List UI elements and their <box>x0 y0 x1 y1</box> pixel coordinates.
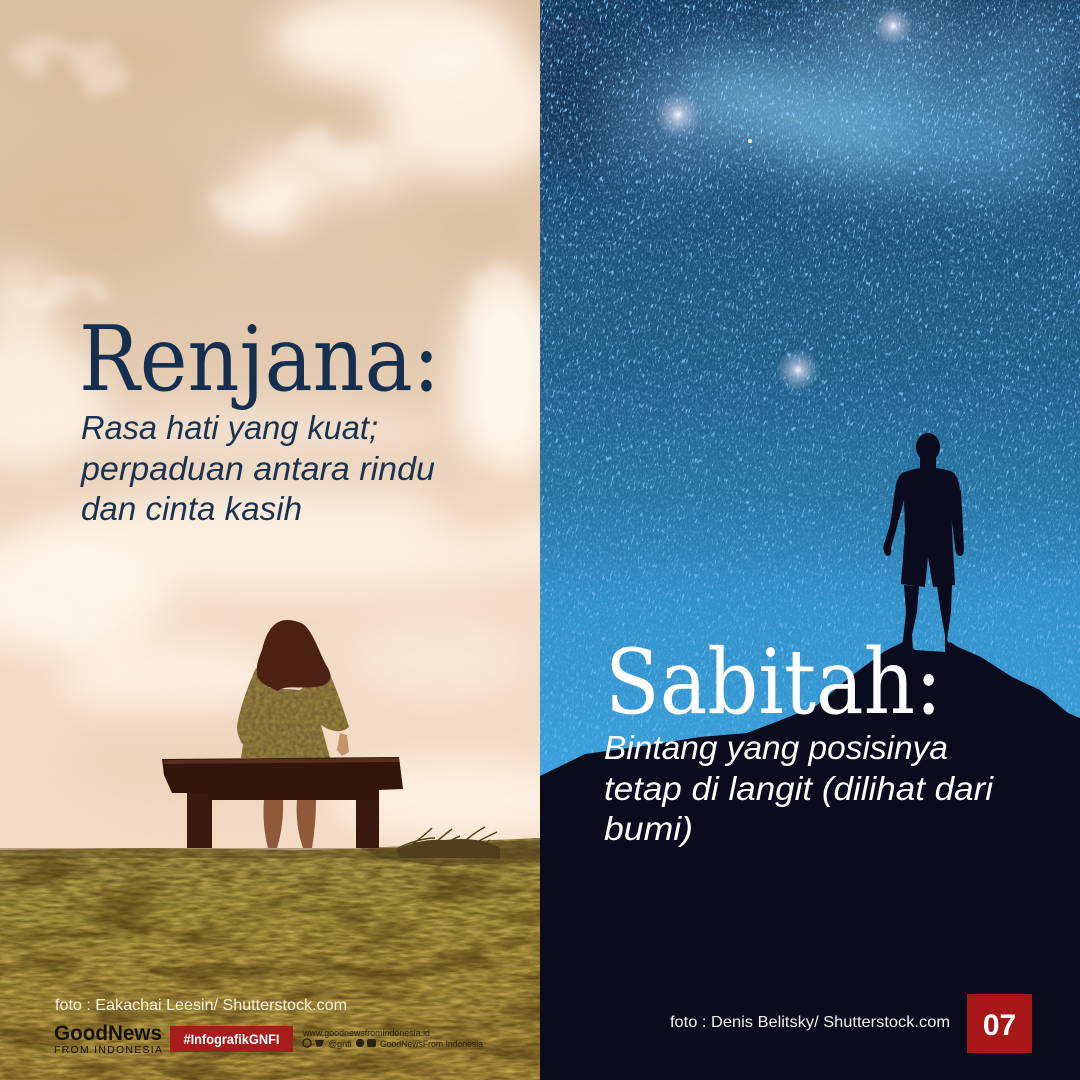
logo: GoodNews From Indonesia: FROM INDONESIA <box>54 1044 162 1056</box>
description: Sabitah: Bintang yang posisinya <box>604 729 948 766</box>
description: Renjana: Rasa hati yang kuat; <box>81 409 378 446</box>
description: Sabitah <box>604 729 995 847</box>
grass ground <box>0 838 540 1080</box>
description: Renjana: perpaduan antara rindu <box>80 450 435 487</box>
social contact <box>302 1028 483 1049</box>
sky background <box>0 0 540 860</box>
panel: Sabitah photo <box>540 0 1080 1080</box>
dress <box>237 668 349 758</box>
description: Renjana <box>80 415 434 520</box>
hashtag badge <box>170 1026 293 1052</box>
hair <box>257 620 330 691</box>
page number badge: 07 <box>983 1009 1016 1042</box>
hand <box>337 733 349 756</box>
social contact: www.goodnewsfromindonesia.id <box>302 1028 430 1038</box>
title: Sabitah: Sabitah: <box>605 630 942 735</box>
description: Sabitah: bumi) <box>604 810 693 847</box>
page number badge <box>967 994 1032 1053</box>
night sky <box>540 0 1080 800</box>
description: Renjana: dan cinta kasih <box>81 490 302 527</box>
milky way <box>530 0 1080 214</box>
legs <box>264 799 316 848</box>
woman on bench <box>237 620 349 848</box>
title: Renjana: Renjana: <box>79 307 440 412</box>
grass tuft <box>396 827 500 858</box>
clouds <box>0 0 590 840</box>
photo credit left: foto : Eakachai Leesin/ Shutterstock.com <box>55 997 347 1014</box>
photo credit right: foto : Denis Belitsky/ Shutterstock.com <box>670 1014 950 1031</box>
man silhouette <box>883 433 964 652</box>
hill silhouette <box>540 641 1080 1080</box>
hashtag badge: #InfografikGNFI <box>184 1032 280 1047</box>
star field <box>540 0 1080 774</box>
bright stars <box>654 6 913 392</box>
description: Sabitah: tetap di langit (dilihat dari <box>604 770 995 807</box>
logo: GoodNews From Indonesia: GoodNews <box>54 1022 162 1045</box>
panel: Renjana photo <box>0 0 590 1080</box>
social contact: GoodNewsFrom Indonesia <box>380 1039 483 1049</box>
bench <box>162 757 403 848</box>
social contact: @gnfi <box>328 1039 352 1049</box>
logo: GoodNews From Indonesia <box>54 1024 162 1053</box>
